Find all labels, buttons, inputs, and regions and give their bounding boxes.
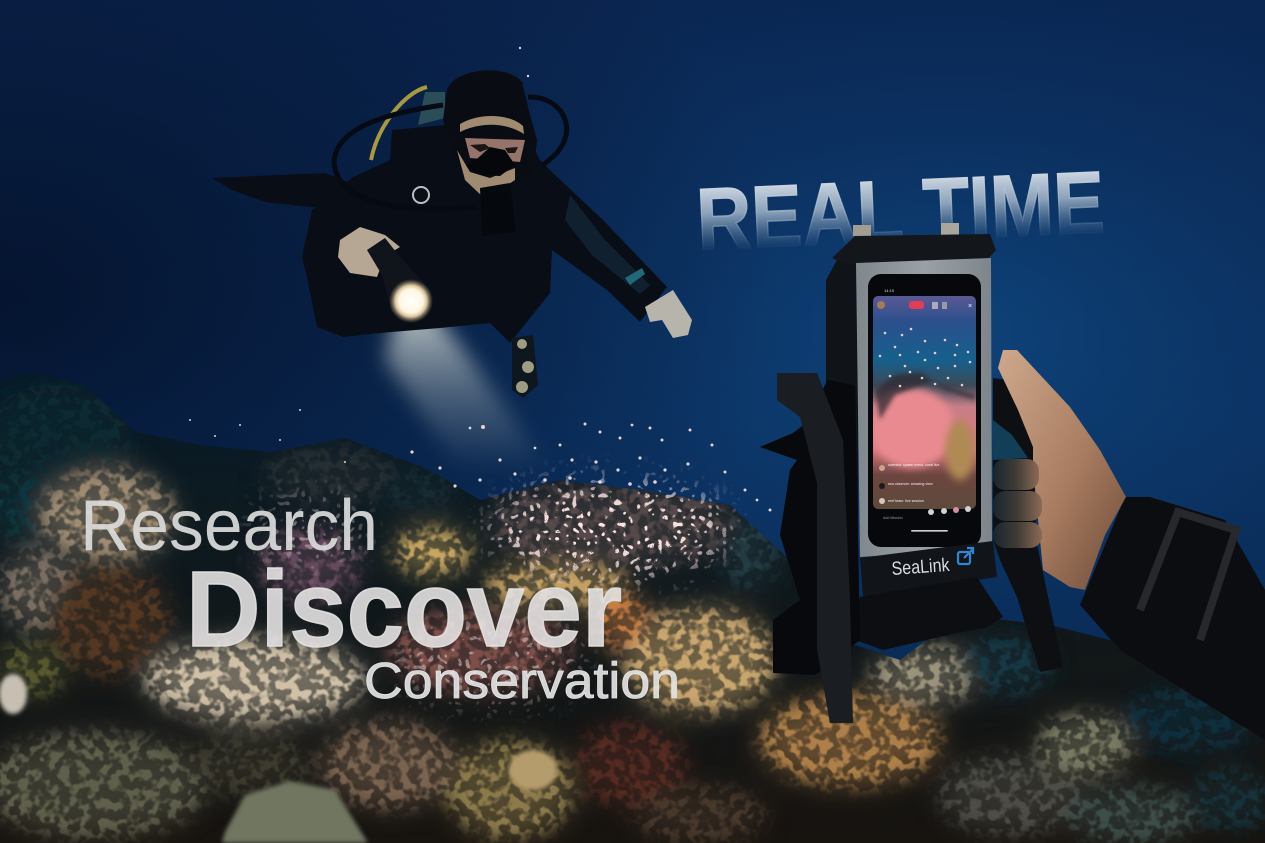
live comments: sea observer: amazing view [888,482,933,486]
lower mount [847,577,1003,650]
phone screen [870,296,976,509]
spawn dots on screen [879,328,971,387]
suit torso and arms [302,125,667,343]
gauges [516,339,534,393]
right arm highlight [565,195,650,294]
spawn particles rising in the water [189,47,772,512]
gauge console [512,335,538,398]
diver [212,70,692,398]
fin [212,173,358,208]
live comments: scientist: spawn event, coral live [888,463,939,467]
forehead band [460,116,524,134]
torch light beam [385,306,548,472]
fingers [993,459,1042,548]
coral on screen [870,388,954,468]
phone body [868,274,981,547]
yellow air hose [371,87,427,160]
soft colour wash under the coral [0,442,1265,843]
brand logo on chest [413,187,429,203]
palm and thumb [998,350,1126,590]
diver sleeve [1080,497,1265,740]
link icon [958,548,973,564]
live stream account header [877,301,972,310]
text: Conservation: Conservation [364,652,680,709]
silver frame [856,258,992,557]
phone bottom bar [883,506,971,532]
right glove [645,290,692,338]
black hoses [334,97,567,209]
dive mask frame [466,147,515,176]
heading: REAL TIME: REAL TIME [695,152,1106,269]
coral spawn particles over the reef [239,456,753,725]
live comments: reef team: live session [888,499,924,503]
mask eyes [470,144,518,153]
torch lamp glow [389,279,433,323]
top clamp [832,234,996,264]
text: Research: Research [80,486,378,566]
text: Discover: Discover [186,548,622,669]
teal arm patch [625,268,645,285]
SeaLink logo text: SeaLink [891,555,951,580]
phone bottom bar: Add Mission [883,516,903,520]
phone status bar text: 14:15 [884,288,895,293]
rear disc and knob of left grip [760,380,860,675]
regulator [480,183,516,236]
pale rock foreground [222,781,368,843]
head hood [443,70,537,197]
lower face skin [457,150,515,197]
underwater phone rig held in hand [760,223,1265,740]
torch body [367,238,432,318]
white rock at far left [0,674,27,714]
small yellow coral [509,750,557,790]
blue gap behind fingers [993,420,1028,460]
base with SeaLink branding [860,541,997,597]
skin around eyes [465,138,525,162]
mounting knobs [853,225,871,236]
left glove [338,227,400,277]
live comments [879,463,939,504]
coral reef seabed [0,370,1265,843]
right grip handle [993,378,1063,672]
left black housing [826,258,858,570]
wrist strap [1140,512,1236,640]
left grip band [777,373,853,723]
textured coral branches [0,385,1265,843]
air tank valve [418,92,445,125]
live stream account header: × [968,303,972,310]
